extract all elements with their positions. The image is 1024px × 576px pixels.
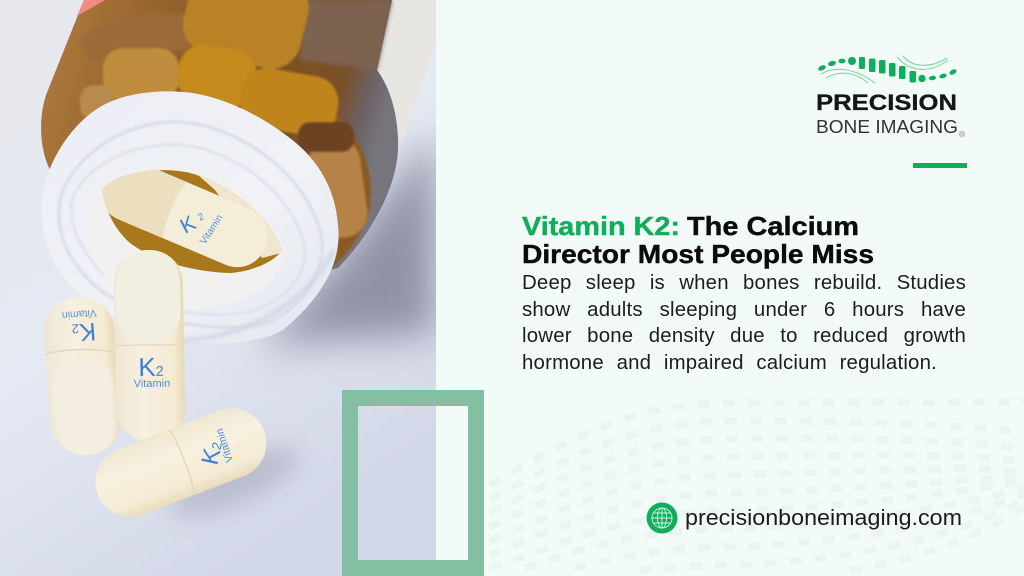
- heading: Vitamin K2:: [522, 211, 680, 241]
- body text: [522, 272, 966, 374]
- capsule: upright with K2 label: [113, 249, 186, 442]
- capsule: upright with K2 label: K2: [138, 352, 164, 382]
- body text: Deep sleep is when bones rebuild. Studies: [522, 272, 966, 294]
- logo: Precision Bone Imaging: BONE IMAGING: [816, 116, 958, 137]
- heading: Director Most People Miss: [522, 239, 874, 269]
- capsule shadow on table: [162, 433, 308, 531]
- capsule: left, upside down: [42, 295, 123, 457]
- accent bar: [913, 163, 967, 168]
- capsule K2 label: [177, 211, 226, 247]
- icon: spine mark: [817, 57, 957, 82]
- logo: Precision Bone Imaging: PRECISION: [816, 90, 957, 115]
- photo: vitamin K2 capsules spilling from an amber bottle: [0, 0, 436, 576]
- amber capsules inside the bottle: [80, 0, 371, 241]
- capsule: lying in front: Vitamin: [214, 427, 236, 464]
- capsule: lying in front: [85, 398, 277, 527]
- capsule inside the cap, clipped to the opening: [102, 170, 282, 268]
- capsule K2 label: K: [177, 212, 200, 238]
- bottle cap with thread rings: [42, 91, 339, 343]
- capsule: upright with K2 label: Vitamin: [134, 378, 170, 390]
- body text: hormone and impaired calcium regulation.: [522, 352, 937, 374]
- amber bottle: [41, 0, 398, 300]
- capsule: left, upside down: K2: [71, 317, 97, 347]
- table shadow behind the bottle: [260, 130, 436, 345]
- body text: show adults sleeping under 6 hours have: [522, 299, 966, 321]
- capsule: left, upside down: Vitamin: [61, 307, 97, 321]
- capsule K2 label: 2: [196, 211, 207, 224]
- bottle label: [378, 0, 436, 142]
- body text: lower bone density due to reduced growth: [522, 325, 966, 347]
- capsule: lying in front: K2: [196, 439, 228, 467]
- heading: The Calcium: [687, 211, 859, 241]
- capsule K2 label: Vitamin: [198, 213, 226, 247]
- website url: precisionboneimaging.com: [685, 505, 962, 530]
